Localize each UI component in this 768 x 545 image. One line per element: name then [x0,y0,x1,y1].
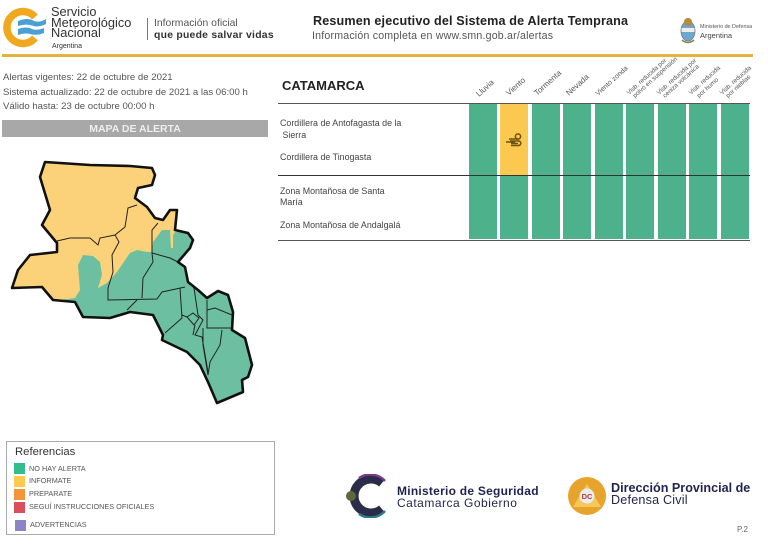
logo: Ministerio de Defensa [680,18,696,44]
label advertencias: ADVERTENCIAS [30,520,87,529]
hazard column headers: Nevada [564,72,591,97]
zone: Antofagasta [280,118,402,140]
zone: Santa María: Zona Montañosa de Santa [280,186,385,196]
table rules [278,103,750,104]
civil defense text: Defensa Civil [611,492,688,506]
column Tormenta [532,104,560,239]
civil defense text [611,481,750,506]
zone: Santa María: María [280,197,303,207]
column humo [689,104,717,239]
logo: Defensa Civil [568,477,606,515]
legend title: Referencias [15,446,75,458]
logo text: Servicio Meteorológico Nacional Argentina: Nacional [51,25,101,40]
hazard column headers: Visb. reducida [688,64,722,96]
hazard column headers: por humo [696,76,720,99]
title: Resumen ejecutivo del Sistema de Alerta Temprana [313,14,628,28]
column Nevada [563,104,591,239]
map heading bar: MAPA DE ALERTA [89,123,181,135]
logo text: Servicio Meteorológico Nacional Argentina: Meteorológico [51,15,131,30]
zone: Andalgalá: Zona Montañosa de Andalgalá [280,220,400,230]
zone: Santa María [280,186,385,207]
label preparate: PREPARATE [29,489,72,498]
hazard column headers: Tormenta [532,68,564,97]
civil defense text: Dirección Provincial de [611,481,750,495]
swatch yellow [14,476,25,487]
hazard column headers: ceniza volcánica [662,63,701,99]
column ceniza [658,104,686,239]
ministry text: Argentina [700,30,732,40]
zone: Tinogasta: Cordillera de Tinogasta [280,152,371,162]
hazard column headers: Viento [504,75,527,97]
cell Viento alert [500,104,528,176]
column polvo [626,104,654,239]
ministry of security text: Catamarca Gobierno [397,496,517,510]
hazard column headers: Visb. reducida [719,64,753,96]
hazard column headers: polvo en suspensión [632,56,679,99]
column Viento zonda [595,104,623,239]
label segui: SEGUÍ INSTRUCCIONES OFICIALES [29,502,154,511]
hazard column headers: Lluvia [474,77,496,98]
legend panel [6,441,275,535]
alert dates: Sistema actualizado: 22 de octubre de 2021 a las 06:00 h [3,86,248,98]
logo: Servicio Meteorológico Nacional [3,8,46,48]
table bottom rule [278,240,750,241]
column Viento lower [500,176,528,239]
province heading: CATAMARCA [282,78,365,93]
header rule [2,54,753,57]
alert dates: Válido hasta: 23 de octubre 00:00 h [3,101,154,112]
province fill [14,163,251,402]
swatch green [14,463,25,474]
label informate: INFORMATE [29,476,71,485]
logo: Catamarca C [346,474,386,518]
alert grid [469,104,749,239]
zone: Antofagasta: Sierra [282,130,306,140]
alert dates [3,72,248,112]
tagline: Información oficial [154,18,238,29]
hazard column headers: por nieblas [725,74,752,99]
swatch orange [14,489,25,500]
subtitle: Información completa en www.smn.gob.ar/alertas [312,30,553,42]
logo text: Servicio Meteorológico Nacional Argentina: Servicio [51,4,97,19]
map heading bar [2,120,268,137]
hazard column headers: Visb. reducida por [626,57,668,96]
logo text: Servicio Meteorológico Nacional Argentina: Argentina [52,43,82,50]
ministry of security text: Ministerio de Seguridad [397,484,539,498]
logo text: Servicio Meteorológico Nacional Argentina [51,4,131,50]
ministry text [700,24,752,40]
province outline [12,162,252,403]
swatch purple [15,520,26,531]
column nieblas [721,104,749,239]
department borders [57,205,232,375]
page number: P.2 [737,525,748,534]
alert dates: Alertas vigentes: 22 de octubre de 2021 [3,72,173,83]
ministry text: Ministerio de Defensa [700,24,752,30]
zone: Antofagasta: Cordillera de Antofagasta de la [280,118,401,128]
swatch red [14,502,25,513]
hazard column headers: Visb. reducida por [656,57,698,96]
alert map: Catamarca [10,160,254,404]
label no alert: NO HAY ALERTA [29,464,86,473]
row divider [278,175,750,176]
ministry of security text [397,484,539,510]
logo: Defensa Civil: DC [582,492,593,501]
column Lluvia [469,104,497,239]
tagline [147,18,284,40]
hazard column headers: Viento zonda [595,65,630,97]
tagline: que puede salvar vidas [154,30,274,40]
icon: wind [506,133,522,146]
hazard column headers [474,56,753,99]
